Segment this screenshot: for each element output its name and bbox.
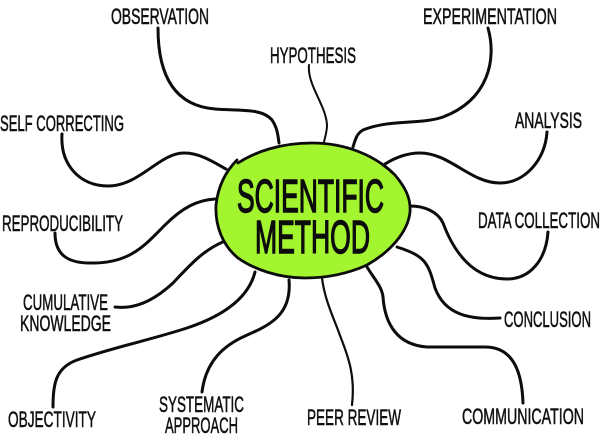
branch: reproducibility: REPRODUCIBILITY [2, 211, 123, 236]
branch: reproducibility [2, 199, 215, 263]
branch: conclusion [397, 247, 591, 332]
branch: systematic approach: SYSTEMATIC [159, 392, 244, 417]
branch: data collection [410, 206, 600, 279]
branch: analysis [385, 108, 582, 183]
branch: peer review [307, 278, 401, 430]
branch: systematic approach [159, 280, 289, 438]
branch: self correcting: SELF CORRECTING [0, 111, 124, 136]
branch: hypothesis: HYPOTHESIS [270, 43, 356, 68]
branch: cumulative knowledge: CUMULATIVE [23, 290, 108, 315]
branch: observation [111, 4, 279, 143]
green blob [216, 143, 410, 278]
title: method: METHOD [255, 211, 370, 263]
branch: objectivity [8, 272, 255, 432]
branch: experimentation [353, 4, 557, 147]
branch: hypothesis [270, 43, 356, 142]
branch: objectivity: OBJECTIVITY [8, 407, 96, 432]
branch: observation: OBSERVATION [111, 4, 209, 29]
branch: systematic approach: APPROACH [165, 413, 238, 438]
title: scientific: SCIENTIFIC [237, 170, 384, 222]
branch: communication [367, 267, 584, 429]
branch: cumulative knowledge: KNOWLEDGE [20, 311, 111, 336]
branch: self correcting [0, 111, 226, 186]
branch: peer review: PEER REVIEW [307, 405, 401, 430]
central green node [216, 143, 410, 278]
branch: cumulative knowledge [20, 241, 225, 336]
